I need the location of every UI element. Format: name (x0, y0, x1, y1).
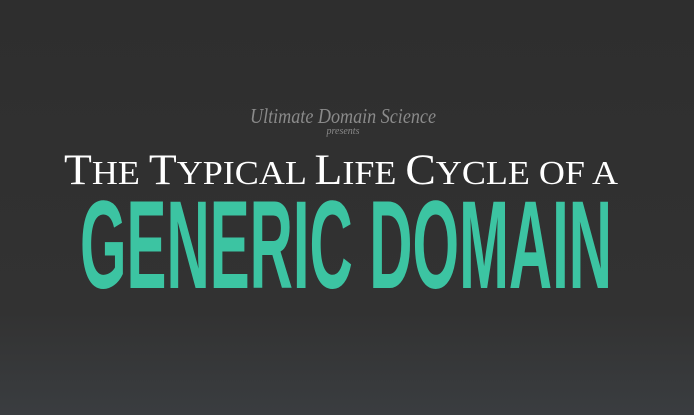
presents: presents (326, 126, 360, 137)
title line: THE TYPICAL LIFE CYCLE OF A (64, 147, 618, 194)
brand: Ultimate Domain Science: Ultimate Domain Science (250, 104, 436, 128)
